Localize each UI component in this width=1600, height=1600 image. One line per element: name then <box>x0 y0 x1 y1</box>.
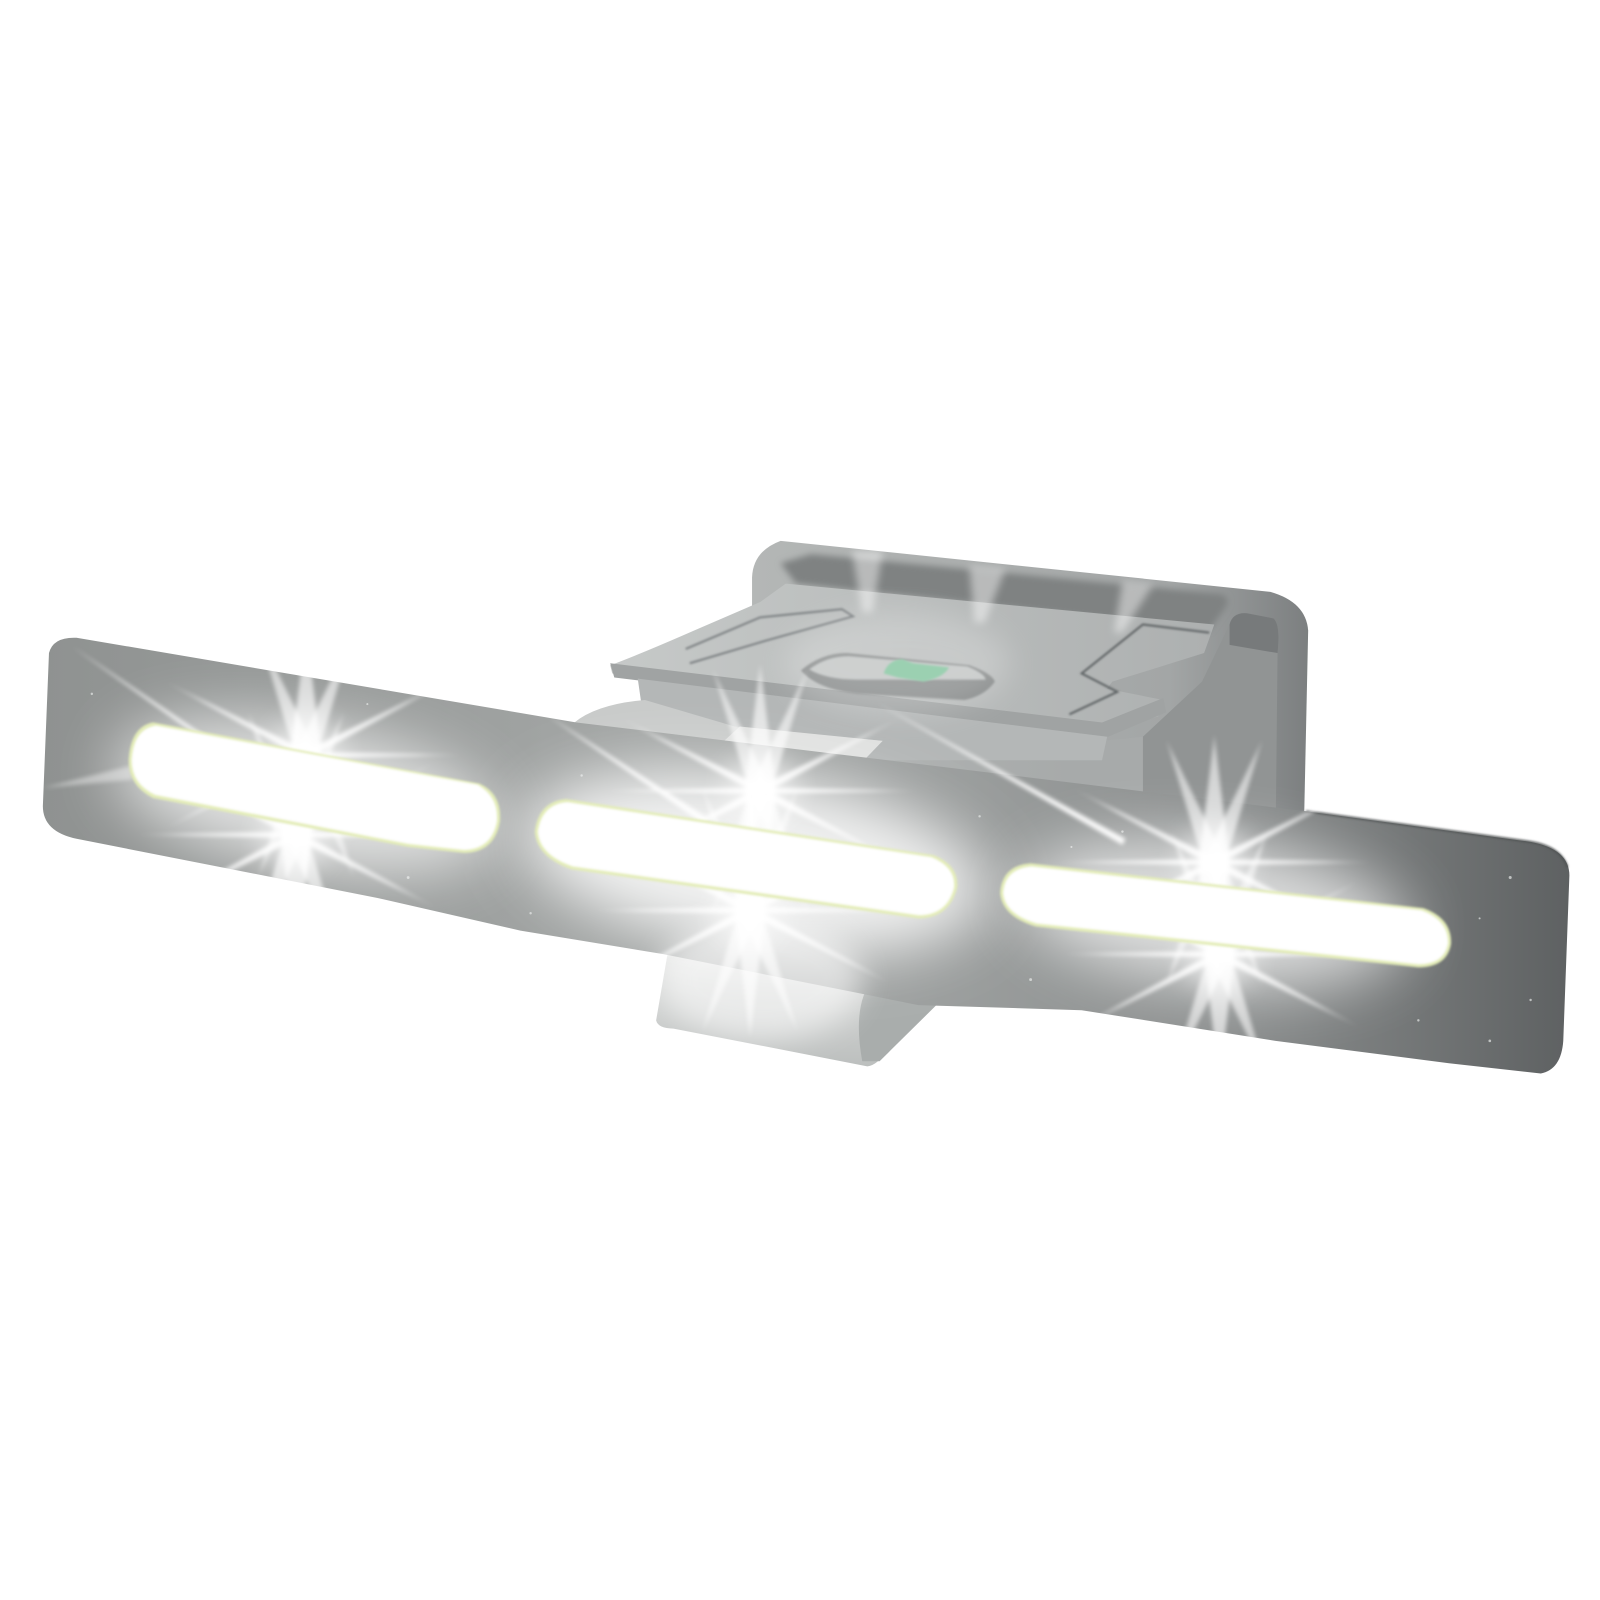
icon: green logo on button <box>884 659 949 682</box>
tongue under plate <box>574 700 883 765</box>
underside wall <box>638 679 1107 760</box>
light bar <box>43 638 1569 1073</box>
top plate <box>610 584 1214 760</box>
box corner block <box>1143 613 1278 847</box>
plate front lip <box>610 663 1166 737</box>
plate seam lines <box>686 609 853 663</box>
long diagonal flares <box>71 646 263 781</box>
bar speckles <box>91 693 1532 1042</box>
slot outer green rim <box>129 722 1451 967</box>
bar right-end edge highlight <box>1306 811 1567 867</box>
light glow <box>103 551 1415 1041</box>
bar body <box>43 638 1569 1073</box>
box inner recess <box>781 554 1228 631</box>
slot white core <box>132 726 1448 964</box>
power button <box>801 653 995 700</box>
mounting clip <box>656 949 969 1066</box>
housing box <box>752 541 1308 867</box>
streaks across box recess <box>852 551 1153 633</box>
light slots <box>129 722 1451 967</box>
light rays <box>43 628 1383 1082</box>
